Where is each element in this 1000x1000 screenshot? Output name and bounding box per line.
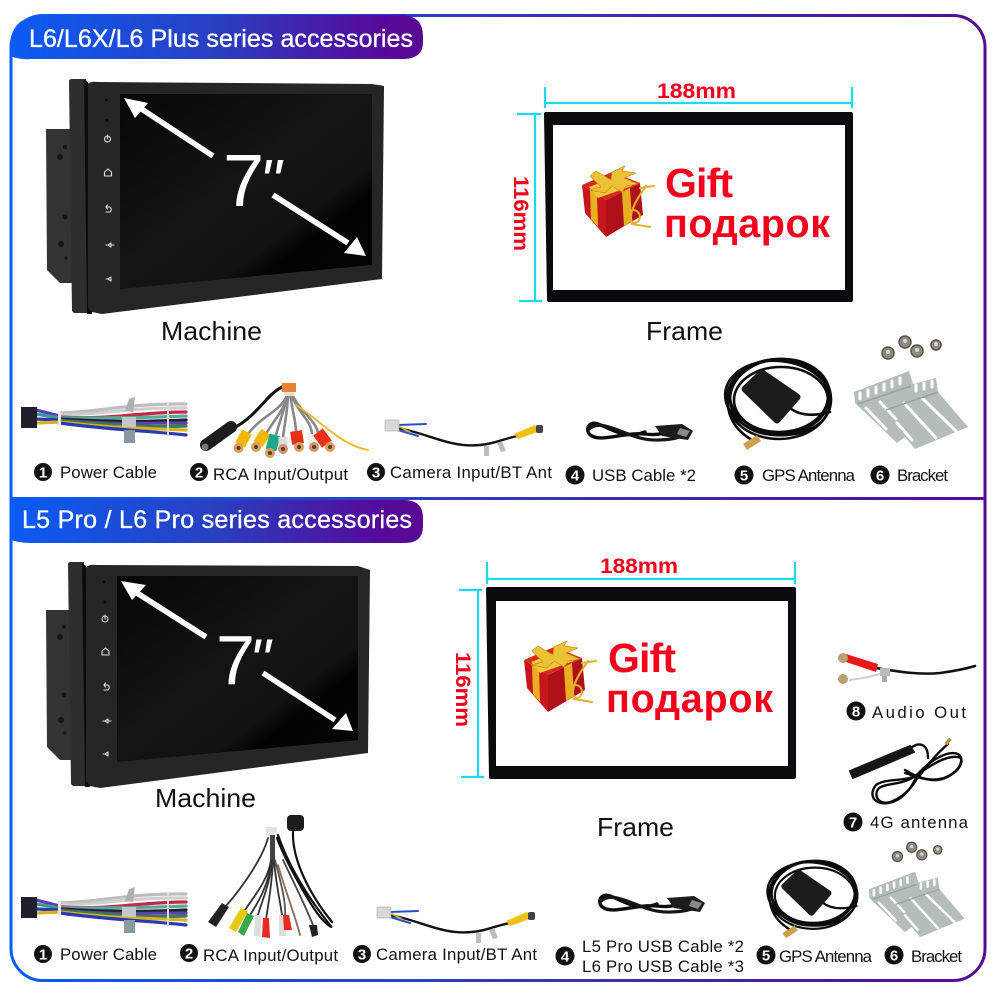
item: power cable	[21, 887, 186, 964]
heading tab: L6 series	[10, 15, 423, 59]
item: USB cable	[566, 423, 696, 485]
item: audio out	[838, 653, 975, 722]
label: Frame: Frame	[646, 316, 723, 346]
frame with gift	[509, 80, 853, 302]
machine: head unit with 7 inch screen: 7	[216, 621, 255, 699]
gift text: Gift	[608, 635, 676, 681]
item: GPS antenna	[756, 857, 873, 966]
gift text: подарок	[664, 202, 830, 246]
item: camera input / BT antenna: Camera Input/BT Ant	[390, 463, 552, 482]
black frame	[544, 112, 853, 302]
item: USB cable	[556, 895, 744, 976]
heading tab: L5 Pro series: L5 Pro / L6 Pro series accessories	[22, 506, 412, 534]
item: RCA input/output	[180, 815, 338, 965]
machine: head unit with 7 inch screen	[46, 562, 370, 788]
item: RCA input/output: 2	[185, 946, 193, 962]
item: GPS antenna: 5	[762, 948, 770, 964]
item: 4G antenna: 4G antenna	[870, 813, 969, 832]
item: bracket: Bracket	[897, 466, 948, 485]
item: 4G antenna: 7	[849, 814, 857, 832]
item: bracket	[854, 336, 968, 485]
item: RCA input/output: RCA Input/Output	[203, 946, 338, 965]
icon: gift box	[524, 641, 596, 712]
dimension: 116mm	[451, 590, 484, 777]
gift text	[664, 160, 830, 246]
item: bracket: 6	[890, 948, 898, 964]
dimension: 116mm: 116mm	[509, 176, 532, 251]
dimension: 188mm	[545, 80, 852, 108]
item: 4G antenna	[844, 738, 969, 832]
black frame	[486, 587, 796, 779]
gift text: подарок	[606, 677, 773, 721]
panel: L5 Pro / L6 Pro series	[11, 500, 975, 976]
item: power cable: 1	[39, 946, 47, 964]
icon: gift box	[582, 166, 654, 237]
label: Machine: Machine	[161, 316, 262, 346]
item: GPS antenna	[721, 355, 856, 485]
item: power cable	[21, 397, 186, 482]
dimension: 188mm: 188mm	[600, 555, 678, 578]
label: Machine: Machine	[155, 783, 256, 813]
section divider	[11, 497, 985, 500]
item: camera input / BT antenna	[353, 907, 537, 964]
item: GPS antenna: GPS Antenna	[779, 947, 873, 966]
item: GPS antenna: GPS Antenna	[762, 466, 856, 485]
item: bracket	[869, 842, 965, 966]
frame with gift	[451, 555, 796, 779]
heading tab: L5 Pro series	[11, 500, 423, 543]
item: power cable: Power Cable	[60, 945, 157, 964]
item: USB cable: 4	[561, 948, 570, 966]
item: RCA input/output: 2	[195, 464, 203, 482]
item: camera input / BT antenna: Camera Input/BT Ant	[376, 945, 537, 964]
machine: head unit with 7 inch screen	[46, 79, 384, 314]
item: USB cable: 4	[571, 468, 580, 484]
item: audio out: Audio Out	[872, 703, 966, 722]
heading tab: L6 series: L6/L6X/L6 Plus series accessories	[29, 25, 413, 53]
machine: head unit with 7 inch screen: "	[249, 627, 273, 694]
item: power cable: Power Cable	[60, 463, 157, 482]
item: power cable: 1	[39, 464, 47, 482]
dimension: 188mm: 188mm	[657, 80, 736, 103]
item: USB cable: L5 Pro USB Cable *2	[582, 937, 744, 956]
item: camera input / BT antenna	[367, 420, 552, 482]
item: bracket: 6	[876, 468, 884, 484]
item: GPS antenna: 5	[740, 468, 748, 484]
item: audio out: 8	[852, 704, 860, 720]
label: Frame: Frame	[597, 812, 674, 842]
machine: head unit with 7 inch screen: "	[259, 148, 284, 217]
item: bracket: Bracket	[911, 947, 962, 966]
item: RCA input/output: RCA Input/Output	[213, 465, 348, 484]
dimension: 116mm: 116mm	[451, 652, 474, 727]
item: RCA input/output	[190, 383, 368, 484]
item: USB cable: L6 Pro USB Cable *3	[582, 957, 744, 976]
panel: L6 series	[10, 15, 968, 485]
item: USB cable: USB Cable *2	[592, 466, 696, 485]
item: camera input / BT antenna: 3	[358, 946, 366, 964]
gift text: Gift	[665, 160, 733, 206]
machine: head unit with 7 inch screen: 7	[223, 139, 264, 222]
dimension: 188mm	[487, 555, 795, 584]
item: camera input / BT antenna: 3	[372, 464, 380, 482]
gift text	[606, 635, 773, 721]
dimension: 116mm	[509, 114, 542, 301]
